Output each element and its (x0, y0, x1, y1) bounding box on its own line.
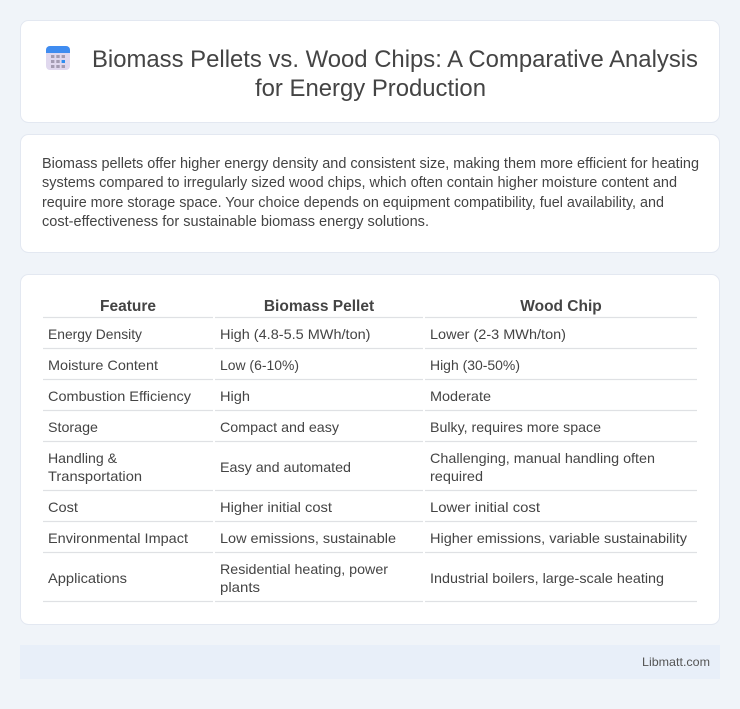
title (92, 46, 698, 102)
row: handling and transportation: Easy and automated (220, 459, 351, 475)
panel: introduction (20, 134, 720, 252)
row: combustion efficiency (48, 388, 491, 404)
intro text block: cost-effectiveness for sustainable biomass energy solutions. (42, 214, 429, 230)
intro text block (42, 156, 699, 230)
row: handling and transportation: Challenging, manual handling often (430, 450, 655, 466)
icon: calendar grid (46, 46, 70, 70)
intro text block: require more storage space. Your choice depends on equipment compatibility, fuel availability, and (42, 195, 664, 211)
footer: Libmatt.com (642, 655, 710, 669)
intro text block: Biomass pellets offer higher energy density and consistent size, making them more efficient for heating (42, 156, 699, 172)
title: Biomass Pellets vs. Wood Chips: A Comparative Analysis (92, 46, 698, 73)
row: storage: Storage (48, 419, 98, 435)
row: moisture content: High (30-50%) (430, 357, 520, 373)
row: environmental impact: Environmental Impact (48, 530, 188, 546)
row: energy density: Energy Density (48, 326, 142, 342)
table header row: Biomass Pellet (264, 298, 374, 315)
row: handling and transportation (48, 450, 655, 484)
row: moisture content: Low (6-10%) (220, 357, 299, 373)
row: combustion efficiency: Combustion Efficiency (48, 388, 191, 404)
row: cost: Higher initial cost (220, 499, 332, 515)
row: handling and transportation: Transportation (48, 468, 142, 484)
row: environmental impact (48, 530, 687, 546)
row: handling and transportation: Handling & (48, 450, 118, 466)
row: handling and transportation: required (430, 468, 483, 484)
panel: comparison table (20, 274, 720, 624)
table header row (100, 298, 602, 315)
row: energy density: Lower (2-3 MWh/ton) (430, 326, 566, 342)
row: applications: plants (220, 579, 260, 595)
panel: header (20, 20, 720, 122)
row: moisture content: Moisture Content (48, 357, 158, 373)
row: storage: Compact and easy (220, 419, 339, 435)
row: applications: Industrial boilers, large-scale heating (430, 570, 664, 586)
row: moisture content (48, 357, 520, 373)
row: energy density (48, 326, 566, 342)
row: combustion efficiency: High (220, 388, 250, 404)
row: storage (48, 419, 601, 435)
row: applications (48, 561, 664, 595)
row: cost: Lower initial cost (430, 499, 540, 515)
row: environmental impact: Low emissions, sustainable (220, 530, 396, 546)
table header row: Wood Chip (520, 298, 602, 315)
row: environmental impact: Higher emissions, variable sustainability (430, 530, 687, 546)
row: energy density: High (4.8-5.5 MWh/ton) (220, 326, 370, 342)
footer (20, 645, 720, 679)
row: applications: Applications (48, 570, 127, 586)
row: combustion efficiency: Moderate (430, 388, 491, 404)
table header row: Feature (100, 298, 156, 315)
row: cost: Cost (48, 499, 78, 515)
row: storage: Bulky, requires more space (430, 419, 601, 435)
row: cost (48, 499, 540, 515)
title: for Energy Production (255, 75, 486, 102)
intro text block: systems compared to irregularly sized wood chips, which often contain higher moisture content and (42, 175, 677, 191)
row: applications: Residential heating, power (220, 561, 388, 577)
